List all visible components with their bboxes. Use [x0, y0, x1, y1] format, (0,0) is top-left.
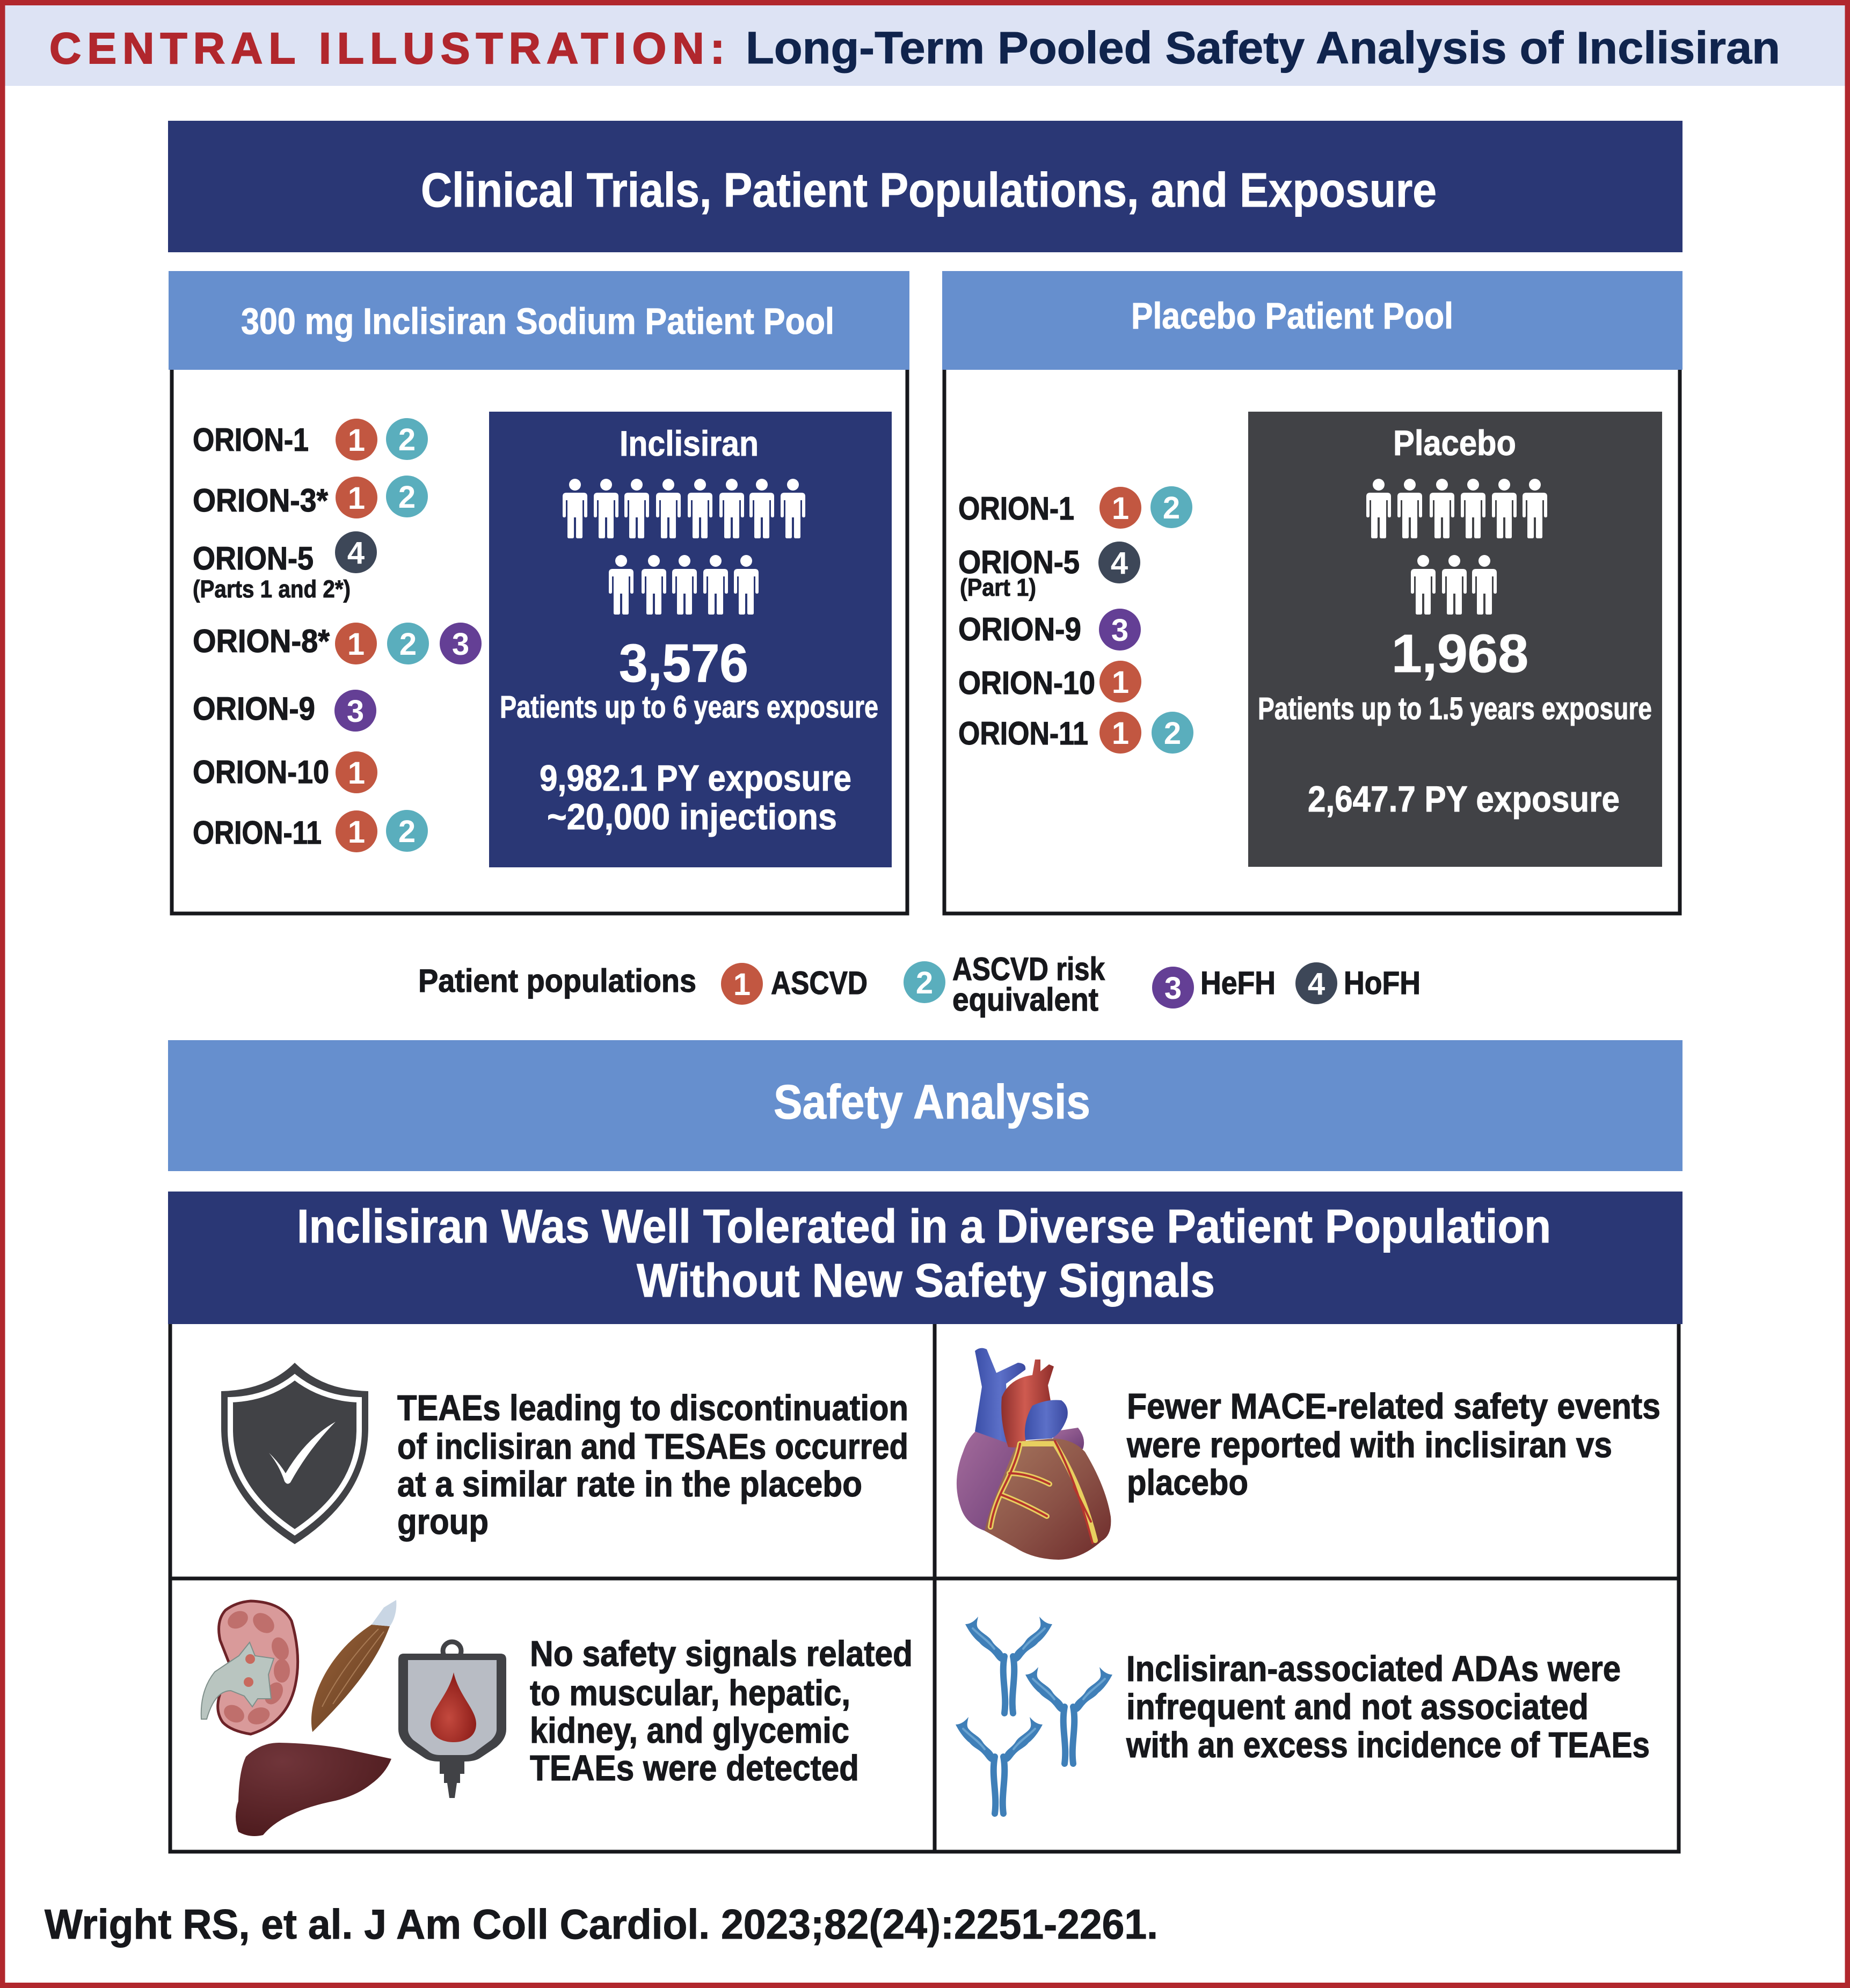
trial row: ORION-1 [193, 418, 428, 461]
trial row: placebo ORION-5: (Part 1) [960, 574, 1036, 601]
icon: shield with check mark [221, 1363, 368, 1544]
icon: liver [236, 1743, 391, 1836]
trial row: placebo ORION-5: ORION-5 [958, 544, 1080, 580]
legend: patient populations: HoFH [1344, 965, 1421, 1001]
trial row: ORION-11: 1 [348, 815, 365, 850]
legend: patient populations: equivalent [952, 982, 1098, 1018]
trial row: ORION-3 [193, 476, 428, 518]
trial row: ORION-8: 2 [399, 627, 417, 662]
icon: blood bag [398, 1642, 506, 1798]
panel: safety findings: Inclisiran Was Well Tolerated in a Diverse Patient Population [297, 1200, 1551, 1253]
stat box: inclisiran: 3,576 [619, 633, 748, 693]
trial row: placebo ORION-9: ORION-9 [958, 611, 1081, 647]
text block: no safety signals: to muscular, hepatic, [530, 1673, 850, 1713]
stat box: inclisiran: Patients up to 6 years exposure [500, 690, 878, 725]
legend: patient populations: 4 [1308, 967, 1325, 1002]
trial row: placebo ORION-1 [958, 486, 1192, 529]
trial row: placebo ORION-11: ORION-11 [958, 715, 1088, 751]
legend: patient populations: 3 [1164, 971, 1182, 1006]
trial row: placebo ORION-9: 3 [1111, 613, 1128, 648]
text block: ADAs infrequent: Inclisiran-associated ADAs were [1126, 1649, 1621, 1689]
trial row: placebo ORION-5: 4 [1111, 546, 1128, 581]
citation: Wright RS, et al. J Am Coll Cardiol. 2023;82(24):2251-2261. [45, 1901, 1158, 1948]
trial row: placebo ORION-11: 1 [1112, 716, 1129, 751]
icon: placebo patients pictogram [1366, 479, 1547, 615]
trial row: ORION-10: 1 [348, 756, 365, 791]
text block: fewer MACE events: Fewer MACE-related safety events [1127, 1386, 1660, 1427]
trial row: ORION-3: 1 [348, 481, 365, 516]
trial row: ORION-1: 1 [348, 423, 365, 458]
trial row: placebo ORION-5 [958, 542, 1140, 601]
trial row: ORION-8: 3 [452, 627, 469, 662]
legend: patient populations: HeFH [1200, 965, 1276, 1001]
trial row: placebo ORION-11: 2 [1164, 716, 1181, 751]
panel: inclisiran patient pool [169, 271, 909, 913]
trial row: placebo ORION-10: 1 [1112, 665, 1129, 700]
text block: no safety signals: TEAEs were detected [530, 1748, 859, 1788]
panel: safety findings: Without New Safety Signals [637, 1254, 1215, 1307]
legend: patient populations: 1 [733, 967, 751, 1002]
stat box: placebo: Patients up to 1.5 years exposure [1258, 691, 1652, 726]
trial row: placebo ORION-9 [958, 609, 1141, 651]
trial row: ORION-8: ORION-8* [193, 623, 330, 659]
trial row: ORION-9 [193, 690, 376, 732]
icon: heart [957, 1348, 1111, 1560]
trial row: ORION-5: (Parts 1 and 2*) [193, 575, 351, 603]
text block: TEAEs discontinuation: TEAEs leading to discontinuation [397, 1388, 908, 1428]
stat box: placebo [1248, 412, 1662, 867]
trial row: placebo ORION-11 [958, 712, 1193, 754]
trial row: ORION-9: 3 [347, 694, 364, 729]
legend: patient populations: ASCVD risk [952, 951, 1105, 987]
text block: fewer MACE events: placebo [1127, 1463, 1248, 1503]
text block: ADAs infrequent: with an excess incidence of TEAEs [1126, 1725, 1650, 1765]
trial row: placebo ORION-10: ORION-10 [958, 665, 1095, 701]
trial row: ORION-5: ORION-5 [193, 540, 314, 576]
trial row: ORION-5 [193, 531, 377, 603]
trial row: ORION-1: 2 [398, 422, 416, 457]
title: central illustration label: CENTRAL ILLUSTRATION: [49, 24, 725, 73]
title banner: Long-Term Pooled Safety Analysis of Inclisiran [746, 23, 1780, 73]
stat box: placebo: 2,647.7 PY exposure [1308, 779, 1620, 820]
text block: TEAEs discontinuation: group [397, 1502, 489, 1542]
trial row: placebo ORION-1: 1 [1112, 491, 1129, 526]
title banner [5, 5, 1845, 86]
text block: no safety signals: kidney, and glycemic [530, 1711, 849, 1751]
text block: fewer MACE events: were reported with inclisiran vs [1126, 1425, 1612, 1465]
trial row: ORION-8: 1 [347, 627, 365, 662]
heading band: safety analysis: Safety Analysis [774, 1076, 1090, 1129]
trial row: ORION-10: ORION-10 [193, 754, 329, 790]
stat box: inclisiran: ~20,000 injections [547, 796, 837, 837]
heading band: clinical trials: Clinical Trials, Patient Populations, and Exposure [421, 164, 1437, 217]
stat box: inclisiran [489, 412, 892, 867]
text block: TEAEs discontinuation [397, 1388, 908, 1542]
legend: patient populations [418, 951, 1421, 1018]
panel: inclisiran patient pool: 300 mg Inclisiran Sodium Patient Pool [241, 301, 834, 342]
trial row: ORION-3: ORION-3* [193, 483, 329, 518]
stat box: inclisiran: 9,982.1 PY exposure [540, 758, 851, 799]
text block: fewer MACE events [1126, 1386, 1660, 1503]
trial row: ORION-1: ORION-1 [193, 422, 309, 458]
trial row: placebo ORION-1: 2 [1163, 491, 1180, 525]
text block: no safety signals [530, 1634, 913, 1788]
icon: muscle [311, 1600, 396, 1732]
legend: patient populations: ASCVD [771, 965, 868, 1001]
text block: TEAEs discontinuation: of inclisiran and TESAEs occurred [397, 1427, 908, 1467]
legend: patient populations: 2 [916, 966, 933, 1000]
icon: anti-drug antibodies [956, 1617, 1112, 1814]
trial row: ORION-11: ORION-11 [193, 815, 322, 851]
trial row: ORION-3: 2 [398, 480, 416, 515]
panel: placebo patient pool [942, 271, 1683, 913]
stat box: placebo: 1,968 [1392, 624, 1528, 684]
trial row: ORION-8 [193, 623, 482, 664]
trial row: ORION-11: 2 [398, 814, 416, 849]
trial row: ORION-11 [193, 810, 428, 852]
panel: safety findings [168, 1192, 1683, 1852]
stat box: inclisiran: Inclisiran [620, 423, 759, 463]
text block: no safety signals: No safety signals related [530, 1634, 913, 1674]
trial row: ORION-9: ORION-9 [193, 691, 315, 727]
icon: inclisiran patients pictogram [563, 479, 805, 615]
trial row: ORION-5: 4 [347, 536, 365, 571]
heading band: safety analysis [168, 1040, 1683, 1171]
stat box: placebo: Placebo [1393, 423, 1516, 463]
panel: placebo patient pool: Placebo Patient Pool [1131, 295, 1453, 337]
heading band: clinical trials [168, 121, 1683, 252]
trial row: placebo ORION-1: ORION-1 [958, 491, 1074, 527]
text block: ADAs infrequent: infrequent and not associated [1126, 1687, 1589, 1727]
text block: ADAs infrequent [1126, 1649, 1650, 1765]
legend: patient populations: Patient populations [418, 963, 696, 999]
icon: kidney [201, 1601, 298, 1734]
text block: TEAEs discontinuation: at a similar rate in the placebo [397, 1464, 862, 1504]
